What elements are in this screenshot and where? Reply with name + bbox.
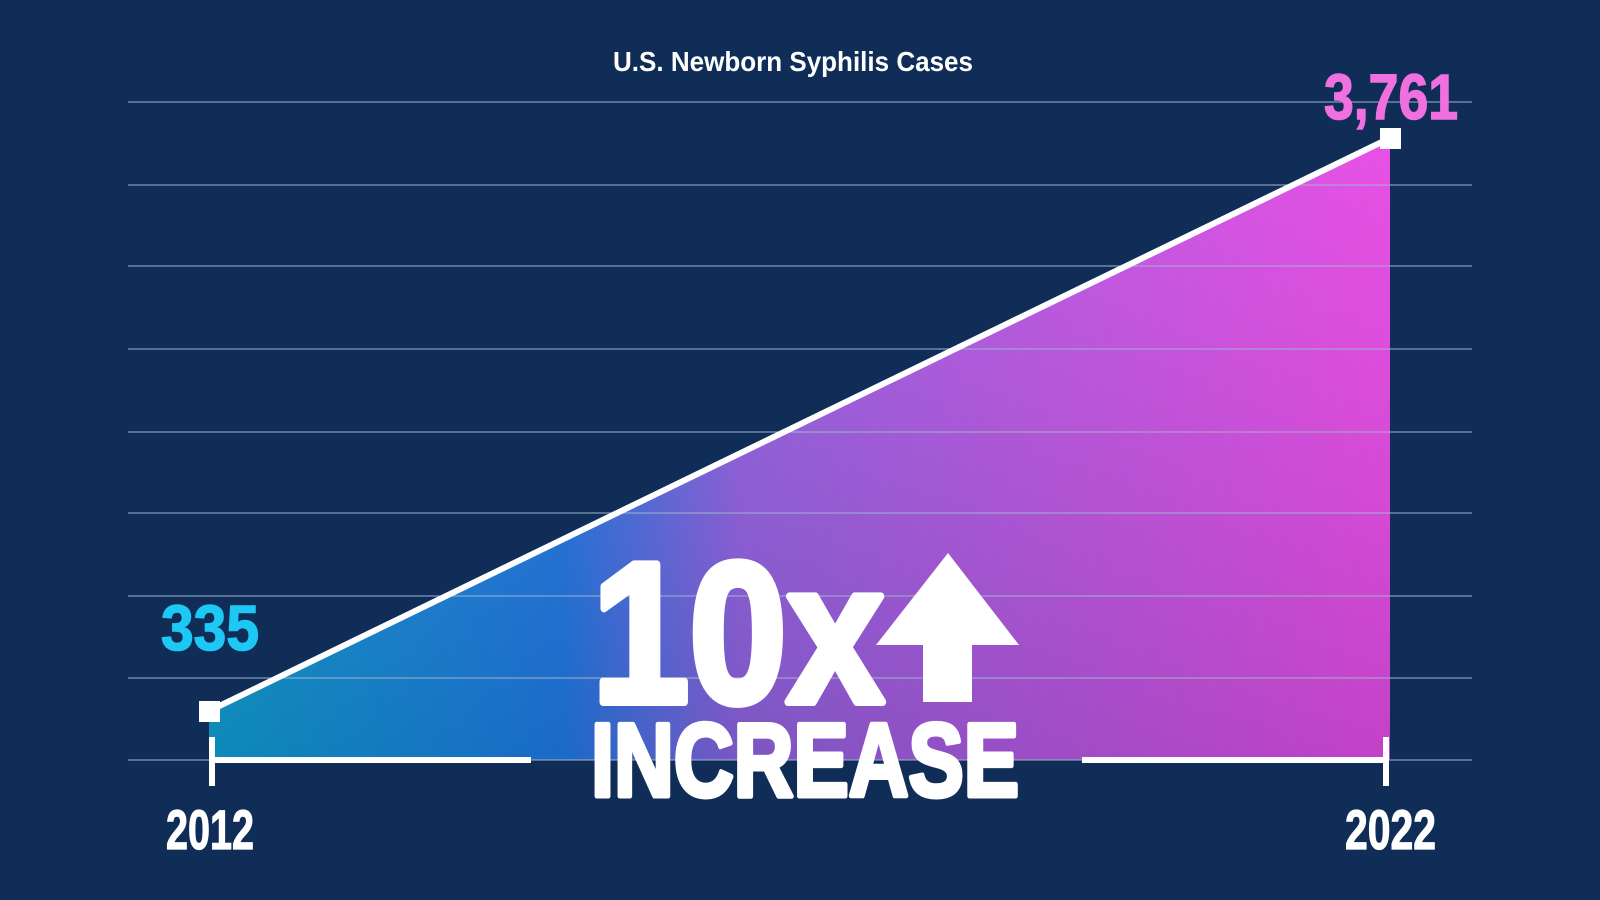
- year labels: 2012: [166, 798, 254, 861]
- value label 2022: 3,761: [1324, 61, 1458, 133]
- title: U.S. Newborn Syphilis Cases: [613, 46, 973, 77]
- year labels: [166, 798, 1436, 861]
- headline 10x increase: 10x: [592, 522, 884, 745]
- axis: [209, 737, 1389, 786]
- headline 10x increase: [591, 522, 1019, 819]
- icon: up arrow: [876, 553, 1019, 702]
- value label 2012: 335: [161, 592, 259, 664]
- area chart: [128, 102, 1472, 760]
- year labels: 2022: [1345, 798, 1436, 861]
- headline 10x increase: INCREASE: [591, 703, 1019, 819]
